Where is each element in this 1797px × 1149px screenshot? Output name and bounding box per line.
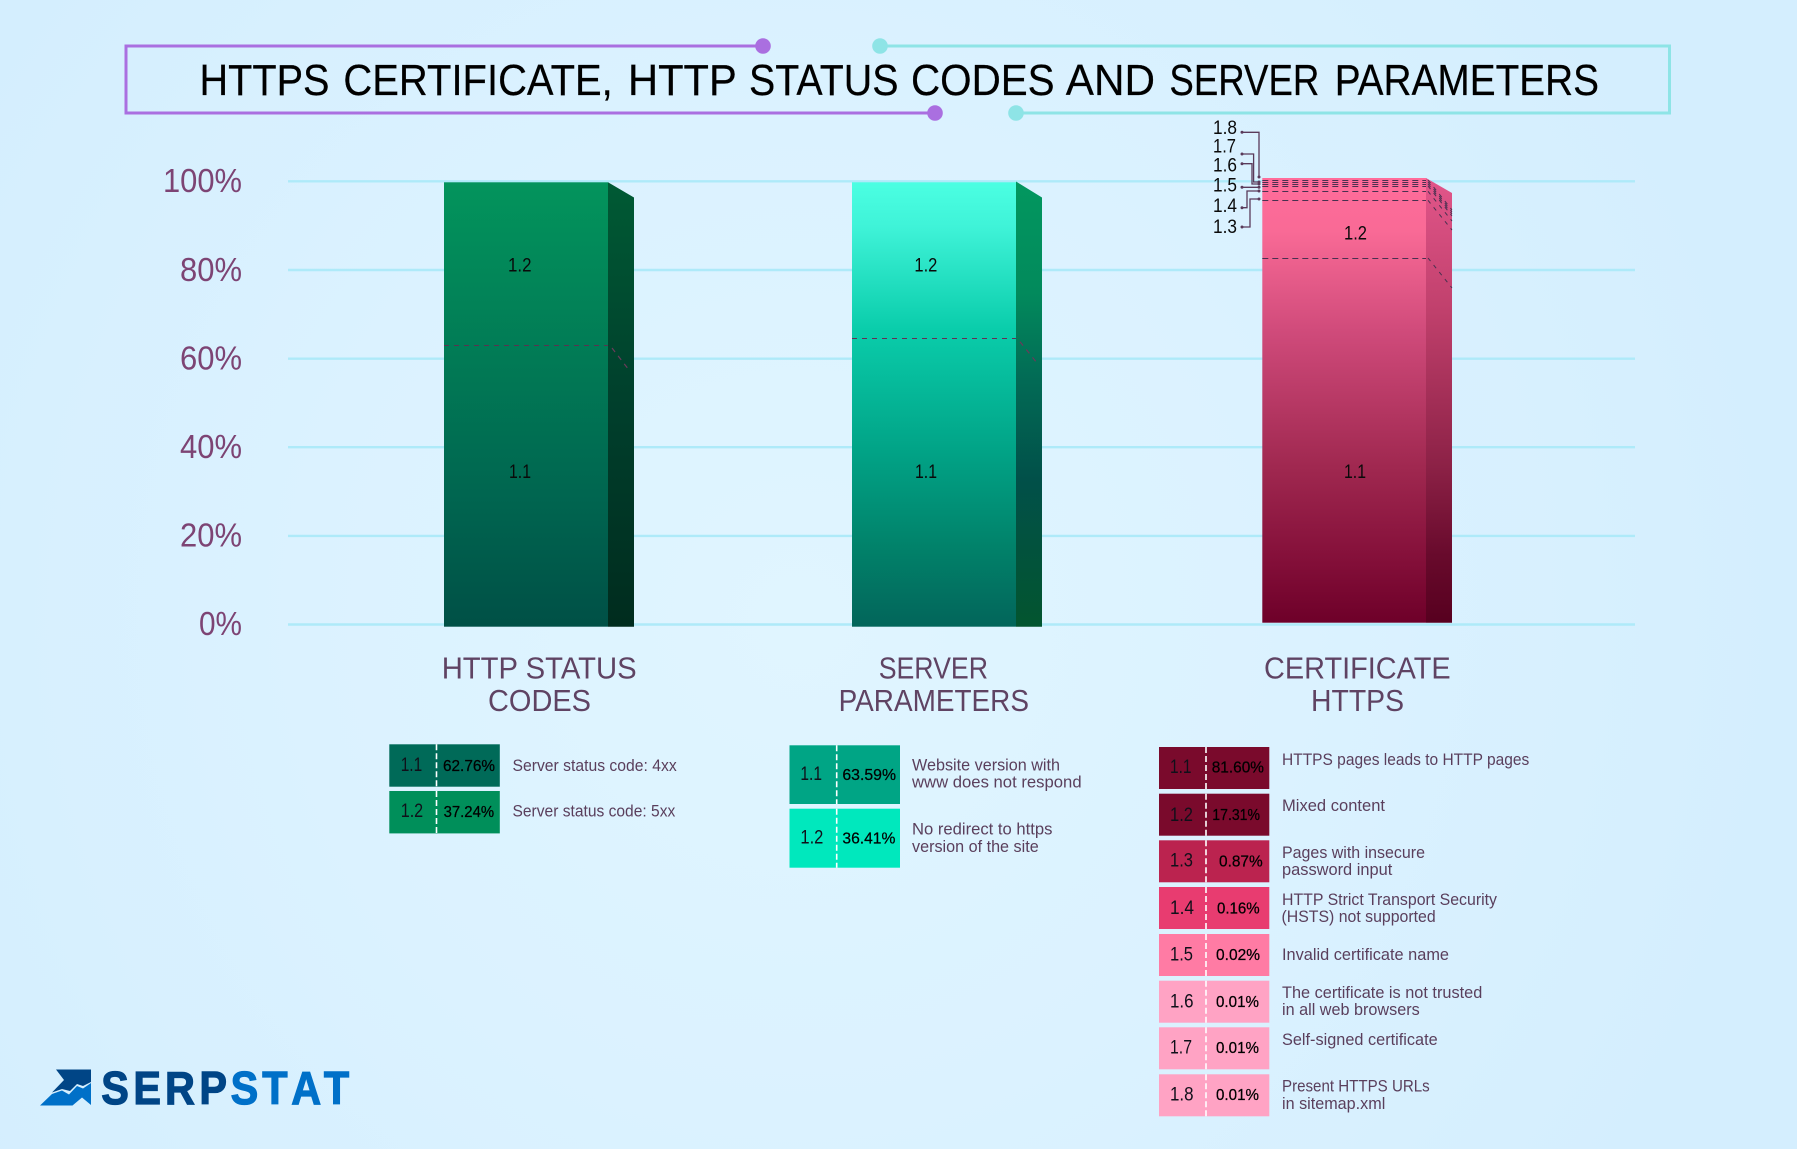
row 1.1: www does not respond (911, 774, 1082, 792)
segment label 1.1: 1.1 (915, 462, 937, 483)
row 1.2 (1159, 794, 1385, 836)
row 1.7: Self-signed certificate (1282, 1031, 1438, 1049)
row 1.2: 1.2 (1170, 805, 1193, 826)
bar: certificate HTTPS (1262, 178, 1452, 623)
heading: server parameters: SERVER (879, 651, 988, 686)
logo: Serpstat: STAT (231, 1063, 349, 1115)
y axis labels (163, 162, 242, 642)
heading: certificate HTTPS: HTTPS (1311, 683, 1404, 718)
row 1.6: 1.6 (1170, 992, 1194, 1013)
heading: HTTP status codes: HTTP STATUS (442, 651, 637, 686)
row 1.1 (389, 744, 677, 787)
title: HTTP (628, 57, 736, 105)
y axis labels: 0% (199, 605, 242, 642)
row 1.7: 1.7 (1170, 1038, 1192, 1059)
row 1.2: No redirect to https (912, 821, 1052, 839)
row 1.1 (790, 745, 1082, 804)
y axis labels: 20% (180, 516, 242, 554)
row 1.8: Present HTTPS URLs (1282, 1078, 1430, 1096)
row 1.3: password input (1282, 861, 1393, 879)
y axis labels: 40% (180, 428, 242, 465)
row 1.2: 37.24% (444, 804, 494, 821)
row 1.2: Mixed content (1282, 797, 1385, 815)
segment label 1.1: 1.1 (1344, 462, 1366, 483)
heading: certificate HTTPS: CERTIFICATE (1264, 651, 1451, 686)
row 1.2 (389, 791, 676, 833)
y axis labels: 60% (180, 340, 242, 376)
logo: Serpstat (40, 1063, 349, 1115)
row 1.1: HTTPS pages leads to HTTP pages (1282, 751, 1529, 769)
row 1.2: 36.41% (842, 830, 895, 847)
row 1.2 (790, 809, 1052, 868)
row 1.3: Pages with insecure (1282, 844, 1425, 862)
row 1.3: 0.87% (1219, 854, 1263, 871)
segment label 1.1: 1.1 (509, 462, 531, 483)
row 1.3 (1159, 840, 1425, 882)
row 1.6 (1159, 981, 1482, 1023)
heading: server parameters: PARAMETERS (839, 683, 1029, 718)
heading: HTTP status codes: CODES (488, 683, 591, 718)
row 1.6: 0.01% (1216, 994, 1259, 1011)
row 1.1: 1.1 (1170, 757, 1192, 778)
leader labels for thin certificate segments: 1.6 (1213, 156, 1237, 177)
row 1.2: Server status code: 5xx (512, 803, 676, 821)
row 1.4: HTTP Strict Transport Security (1282, 891, 1498, 909)
title: CODES (911, 57, 1055, 105)
legend: HTTP status codes (389, 744, 677, 833)
title: PARAMETERS (1335, 57, 1599, 105)
leader labels for thin certificate segments: 1.4 (1213, 196, 1237, 217)
row 1.7: 0.01% (1216, 1040, 1259, 1057)
row 1.4: (HSTS) not supported (1282, 908, 1436, 926)
row 1.4: 0.16% (1217, 900, 1260, 917)
row 1.8: 1.8 (1170, 1085, 1194, 1106)
y axis labels: 80% (180, 251, 242, 288)
title: HTTPS (200, 57, 330, 105)
row 1.7 (1159, 1027, 1438, 1069)
leader labels for thin certificate segments (1213, 118, 1260, 238)
row 1.2: version of the site (912, 838, 1039, 856)
row 1.1: Website version with (912, 757, 1060, 775)
row 1.2: 1.2 (800, 827, 823, 848)
row 1.1: 1.1 (401, 755, 422, 776)
row 1.4: 1.4 (1170, 898, 1194, 919)
row 1.8: in sitemap.xml (1282, 1095, 1385, 1113)
row 1.1: 81.60% (1212, 760, 1264, 777)
row 1.1: 62.76% (443, 758, 495, 775)
row 1.4 (1159, 887, 1498, 929)
chart grid lines (288, 181, 1635, 625)
row 1.5: 0.02% (1216, 947, 1260, 964)
title frame: purple and cyan interlocked brackets (126, 38, 1670, 121)
segment label 1.2: 1.2 (508, 256, 532, 277)
title: AND (1066, 57, 1155, 105)
title: CERTIFICATE, (343, 57, 613, 105)
segment label 1.2: 1.2 (1344, 224, 1367, 245)
bar: server parameters (852, 182, 1042, 627)
row 1.5: 1.5 (1170, 945, 1193, 966)
row 1.1: Server status code: 4xx (512, 757, 677, 775)
row 1.2: 1.2 (401, 801, 423, 822)
row 1.6: The certificate is not trusted (1282, 984, 1482, 1002)
leader labels for thin certificate segments: 1.7 (1213, 137, 1236, 158)
title: STATUS (749, 57, 898, 105)
leader labels for thin certificate segments: 1.3 (1213, 217, 1237, 238)
row 1.1: 1.1 (800, 764, 822, 785)
row 1.2: 17.31% (1212, 807, 1260, 824)
row 1.1 (1159, 747, 1529, 789)
row 1.5: Invalid certificate name (1282, 946, 1449, 964)
icon: rising chart arrow (40, 1070, 91, 1106)
heading: HTTP status codes (442, 651, 637, 718)
y axis labels: 100% (163, 162, 242, 199)
leader labels for thin certificate segments: 1.5 (1213, 176, 1237, 197)
legend: certificate HTTPS (1159, 747, 1529, 1116)
legend: server parameters (790, 745, 1082, 868)
row 1.5 (1159, 934, 1449, 976)
row 1.3: 1.3 (1170, 851, 1193, 872)
row 1.1: 63.59% (842, 767, 896, 784)
row 1.8: 0.01% (1216, 1087, 1259, 1104)
bar: HTTP status codes (444, 182, 634, 627)
title: SERVER (1169, 57, 1319, 105)
row 1.8 (1159, 1074, 1430, 1116)
segment label 1.2: 1.2 (914, 256, 937, 277)
logo: Serpstat: SERP (101, 1063, 227, 1115)
heading: certificate HTTPS (1264, 651, 1451, 718)
row 1.6: in all web browsers (1282, 1001, 1420, 1019)
leader labels for thin certificate segments: 1.8 (1213, 118, 1237, 139)
heading: server parameters (839, 651, 1029, 718)
